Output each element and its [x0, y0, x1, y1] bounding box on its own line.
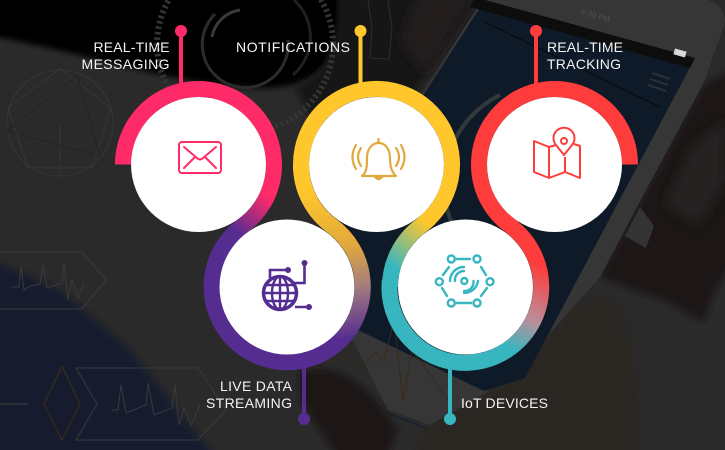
white disc: IoT [398, 220, 533, 354]
tablet header divider [485, 22, 660, 107]
ECG card lower [0, 366, 226, 440]
continuous ribbon linking the five rings [123, 89, 630, 363]
band outline top middle [368, 0, 392, 59]
label: live data streaming: STREAMING [206, 395, 292, 411]
hand lower right [415, 297, 642, 450]
white disc: notifications [309, 97, 444, 232]
label: live data streaming: LIVE DATA [220, 378, 293, 394]
white disc: tracking [487, 97, 622, 232]
icon: globe with circuit traces [263, 260, 312, 310]
pen line lower edge of tablet [387, 413, 428, 429]
connector line and dot: live data streaming [298, 365, 310, 425]
label: real-time tracking: REAL-TIME [547, 39, 623, 55]
lighter patch behind upper hand [400, 0, 480, 75]
connector line and dot: real-time messaging [175, 25, 187, 86]
label: IoT devices: IoT DEVICES [461, 395, 548, 411]
connector line and dot: real-time tracking [530, 25, 542, 86]
tablet status bar [470, 0, 695, 68]
tablet menu icon [648, 73, 670, 91]
label: real-time tracking: TRACKING [547, 56, 621, 72]
connector line and dot: IoT devices [444, 365, 456, 425]
icon: envelope [179, 142, 221, 173]
icon: bell with sound waves [352, 139, 404, 179]
finger shadow right [600, 65, 725, 322]
finger highlight [665, 120, 725, 225]
dark photo area top middle [295, 0, 500, 150]
dark area top left [0, 0, 355, 88]
tablet big circle [444, 95, 500, 230]
label: real-time messaging: MESSAGING [82, 56, 170, 72]
gauge dial [157, 0, 333, 132]
ECG card upper [0, 252, 106, 309]
tablet screen [292, 0, 695, 391]
frame wedge between fingers [625, 207, 654, 248]
thumb lower centre [300, 369, 398, 450]
ECG line on tablet [320, 320, 448, 400]
tablet frame [290, 0, 725, 425]
tablet battery [673, 48, 687, 58]
white disc: live data [220, 220, 354, 354]
white disc: messaging [131, 97, 266, 232]
label: notifications: NOTIFICATIONS [236, 39, 350, 55]
tablet clock: 4:30 PM [579, 7, 611, 24]
navy area bottom left [0, 250, 225, 450]
connector line and dot: notifications [354, 25, 366, 86]
label: real-time messaging: REAL-TIME [94, 39, 170, 55]
icon: folded map with pin [534, 128, 580, 178]
radar chart [7, 69, 113, 176]
icon: IoT hexagon network [436, 256, 494, 306]
